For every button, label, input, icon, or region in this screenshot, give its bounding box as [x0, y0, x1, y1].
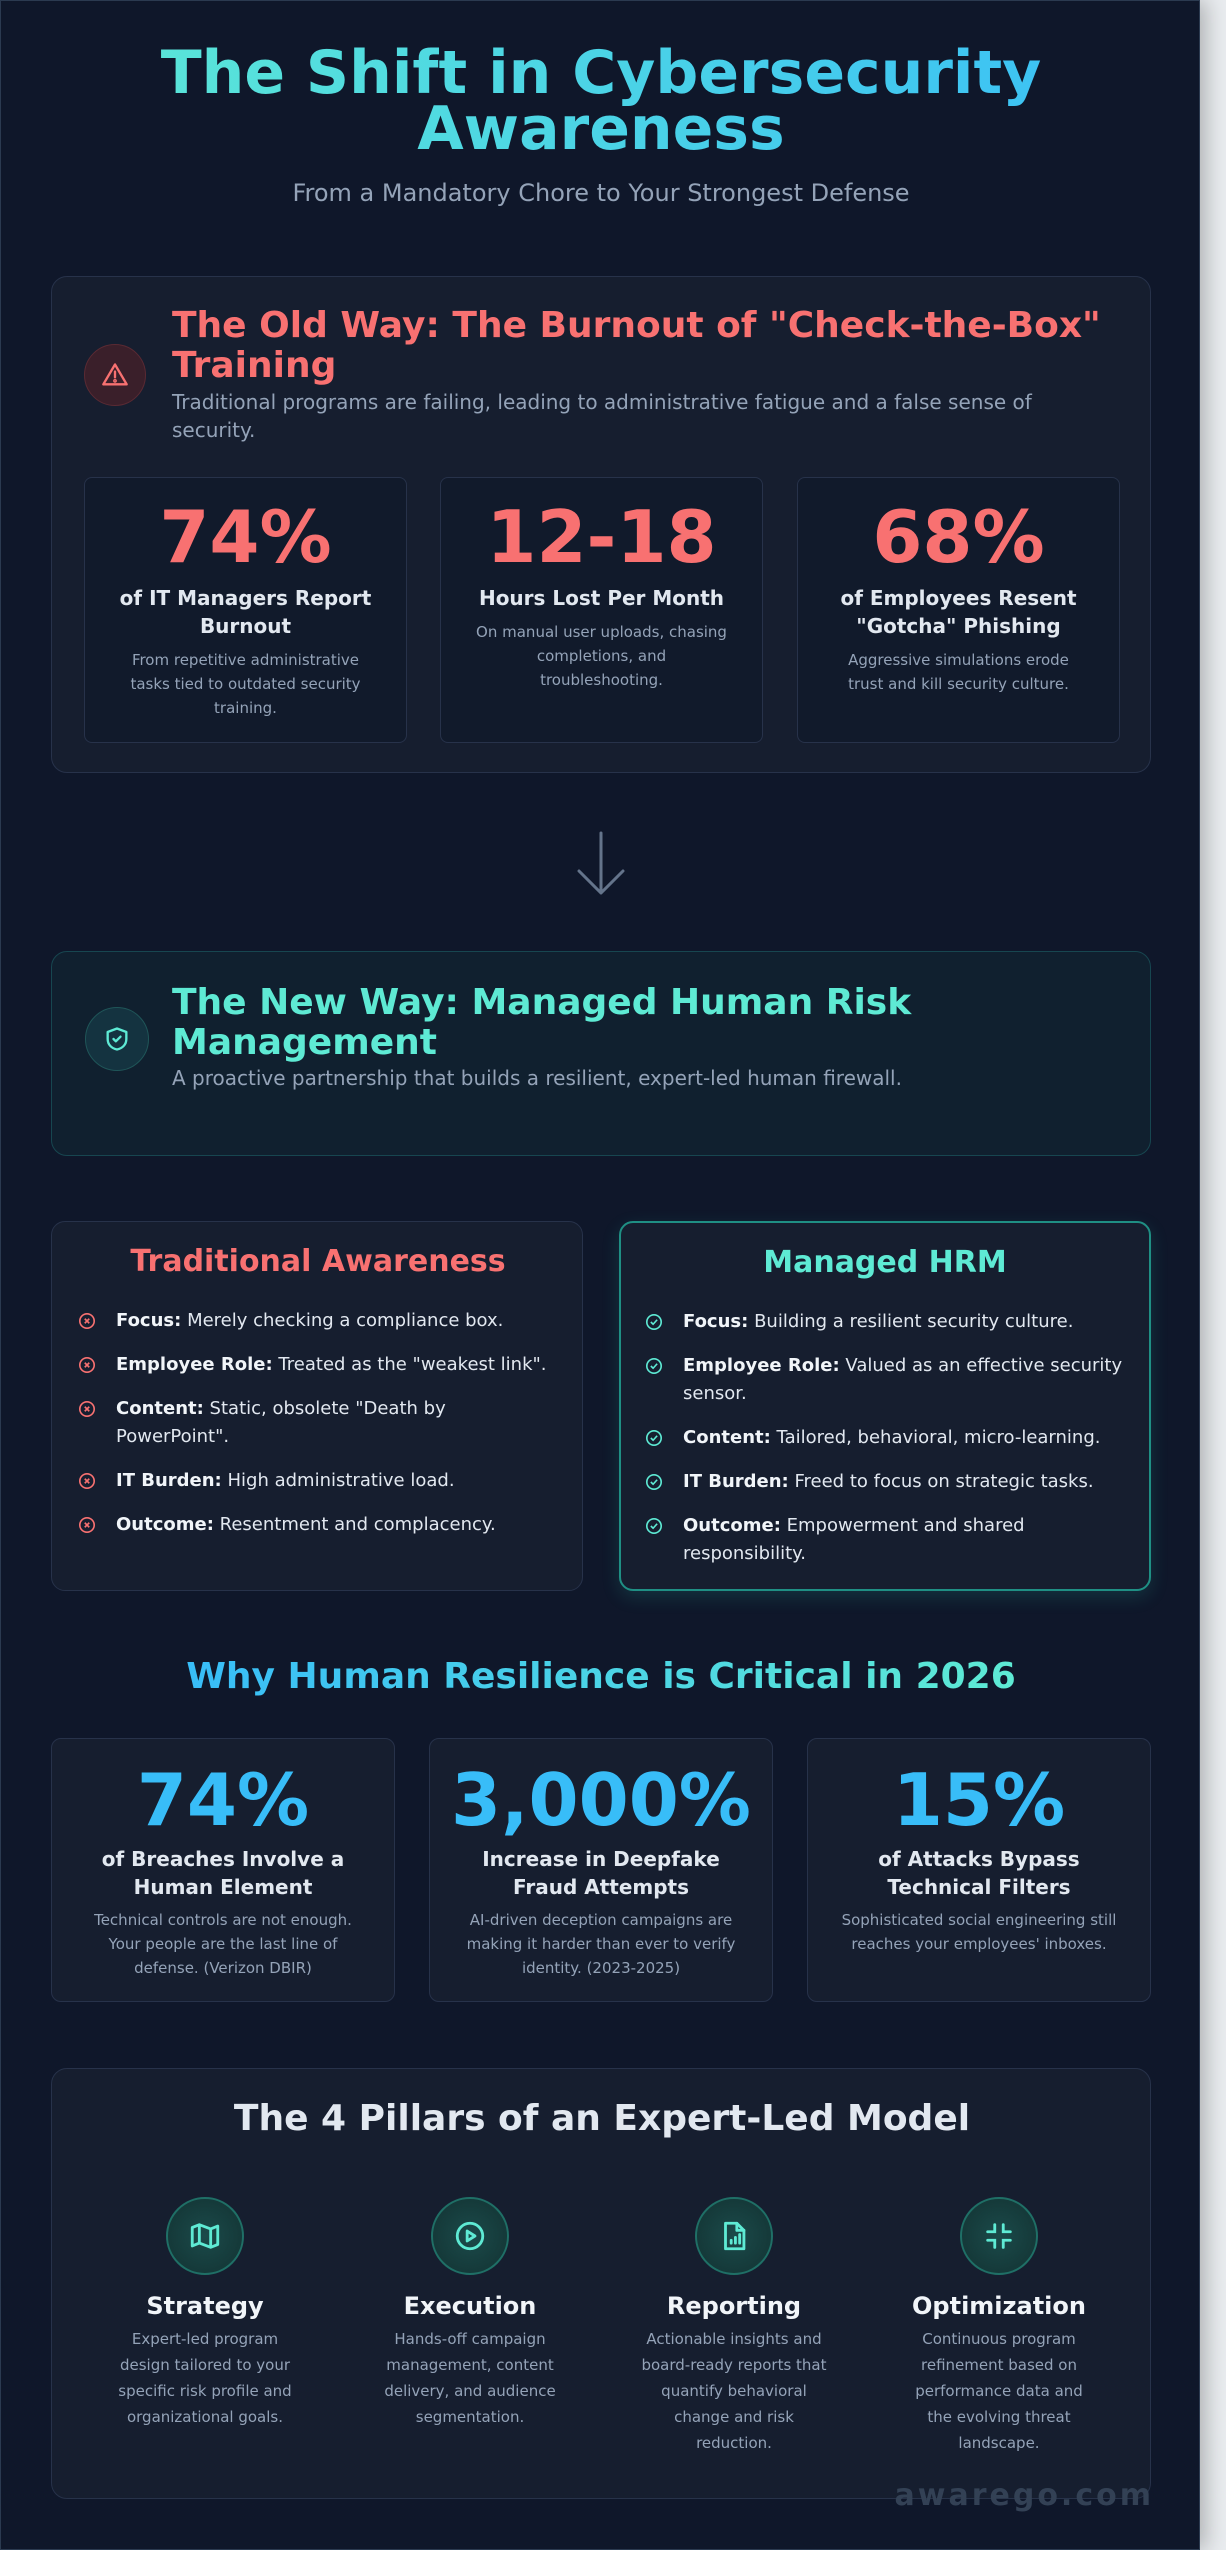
heading: new way: The New Way: Managed Human Risk Management: [172, 982, 911, 1063]
list: HRM items: Content: Tailored, behavioral, micro-learning.: [683, 1427, 1100, 1448]
stat card: 15%: [807, 1738, 1151, 2002]
pillar: strategy: Strategy: [146, 2292, 264, 2320]
stat card: 74%: [84, 477, 407, 743]
list: traditional items: Employee Role: Treated as the "weakest link".: [116, 1354, 547, 1375]
list: HRM items: IT Burden: Freed to focus on strategic tasks.: [683, 1471, 1094, 1492]
list: HRM items: [646, 1311, 1122, 1564]
pillar: reporting: reduction.: [696, 2434, 772, 2452]
pillar: reporting: Actionable insights and board-ready reports that quantify behavioral: [641, 2330, 826, 2400]
stat card: 68%: Aggressive simulations erode trust and kill security culture.: [848, 651, 1069, 693]
stat card: 74% breaches: 74%: [137, 1758, 309, 1842]
pillar: reporting: Reporting: [667, 2292, 801, 2320]
icon: play: [431, 2197, 509, 2275]
pillar: reporting: change and risk: [674, 2408, 794, 2426]
stat card: 68%: of Employees Resent: [840, 586, 1077, 610]
list: HRM items: Outcome: Empowerment and shared responsibility.: [683, 1515, 1025, 1564]
pillar: optimization: Continuous program refinement based on performance data and the evolving threat landscape.: [915, 2330, 1083, 2452]
icon: warning: [84, 344, 146, 406]
stat card: 15%: of Attacks Bypass: [878, 1847, 1080, 1871]
list: HRM items: Employee Role: Valued as an effective security sensor.: [683, 1355, 1122, 1404]
stat card: 15%: Sophisticated social engineering still reaches your employees' inboxes.: [842, 1911, 1116, 1953]
text: old way description: Traditional programs are failing, leading to administrative fatigue and a false sense of security.: [172, 390, 1032, 442]
list: HRM items: Focus: Building a resilient security culture.: [683, 1311, 1073, 1332]
stat card: 74%: 74%: [159, 495, 332, 579]
icon: shrink: [960, 2197, 1038, 2275]
stat card: 3000%: Increase in Deepfake: [482, 1847, 720, 1871]
heading: traditional: Traditional Awareness: [130, 1244, 506, 1279]
watermark: awarego.com: [894, 2478, 1151, 2513]
stat card: 15%: Technical Filters: [887, 1875, 1071, 1899]
panel: managed HRM: [619, 1221, 1151, 1591]
pillar: optimization: [912, 2197, 1086, 2452]
stat card: 12-18: [440, 477, 763, 743]
panel: new way: [51, 951, 1151, 1156]
pillar: execution: [384, 2197, 556, 2426]
heading: managed HRM: Managed HRM: [763, 1245, 1007, 1280]
list: traditional items: Content: Static, obsolete "Death by PowerPoint".: [116, 1398, 446, 1447]
panel: old way: [51, 276, 1151, 773]
pillar: strategy: Expert-led program design tailored to your specific risk profile and organizational goals.: [118, 2330, 292, 2426]
heading: old way: The Old Way: The Burnout of "Check-the-Box" Training: [172, 305, 1101, 386]
stat card: 15%: 15%: [893, 1758, 1065, 1842]
list: traditional items: [79, 1310, 547, 1535]
stat card: 12-18: Hours Lost Per Month: [479, 586, 724, 610]
title: The Shift in Cybersecurity: [161, 38, 1041, 108]
pillar: reporting: [641, 2197, 826, 2452]
pillar: execution: Hands-off campaign management, content delivery, and audience segmentation.: [384, 2330, 556, 2426]
title: Awareness: [417, 94, 785, 164]
arrow: down: [578, 832, 624, 894]
stat card: 12-18: troubleshooting.: [540, 671, 663, 689]
stat card: 12-18: 12-18: [486, 495, 717, 579]
text: new way description: A proactive partnership that builds a resilient, expert-led human firewall.: [172, 1066, 902, 1090]
subtitle: From a Mandatory Chore to Your Strongest Defense: [292, 179, 910, 207]
stat card: 68%: "Gotcha" Phishing: [856, 614, 1061, 638]
stat card: 68%: [797, 477, 1120, 743]
stat card: 74% breaches: Human Element: [134, 1875, 312, 1899]
stat card: 3000%: [429, 1738, 773, 2002]
icon: report file: [695, 2197, 773, 2275]
stat card: 68%: 68%: [872, 495, 1045, 579]
heading: pillars: The 4 Pillars of an Expert-Led Model: [234, 2098, 970, 2139]
list: traditional items: Outcome: Resentment and complacency.: [116, 1514, 496, 1535]
pillar: strategy: [118, 2197, 292, 2426]
stat card: 3000%: Fraud Attempts: [513, 1875, 689, 1899]
list: traditional items: Focus: Merely checking a compliance box.: [116, 1310, 503, 1331]
icon: shield: [85, 1007, 149, 1071]
panel: 4 pillars: [51, 2068, 1151, 2499]
list: traditional items: IT Burden: High administrative load.: [116, 1470, 455, 1491]
panel: traditional awareness: [51, 1221, 583, 1591]
heading: why human resilience: Why Human Resilience is Critical in 2026: [186, 1656, 1016, 1697]
stat card: 74% breaches: [51, 1738, 395, 2002]
stat card: 74%: of IT Managers Report: [120, 586, 371, 610]
icon: map: [166, 2197, 244, 2275]
stat card: 12-18: On manual user uploads, chasing: [476, 623, 727, 641]
stat card: 74%: From repetitive administrative tasks tied to outdated security training.: [130, 651, 361, 717]
title: [1, 45, 1201, 157]
stat card: 12-18: completions, and: [537, 647, 666, 665]
pillar: optimization: Optimization: [912, 2292, 1086, 2320]
stat card: 3000%: AI-driven deception campaigns are making it harder than ever to verify identity. (2023-2025): [467, 1911, 735, 1977]
stat card: 74%: Burnout: [200, 614, 291, 638]
pillar: execution: Execution: [404, 2292, 536, 2320]
stat card: 74% breaches: Technical controls are not enough. Your people are the last line of defense. (Verizon DBIR): [94, 1911, 352, 1977]
stat card: 3000%: 3,000%: [451, 1758, 751, 1842]
stat card: 74% breaches: of Breaches Involve a: [102, 1847, 344, 1871]
